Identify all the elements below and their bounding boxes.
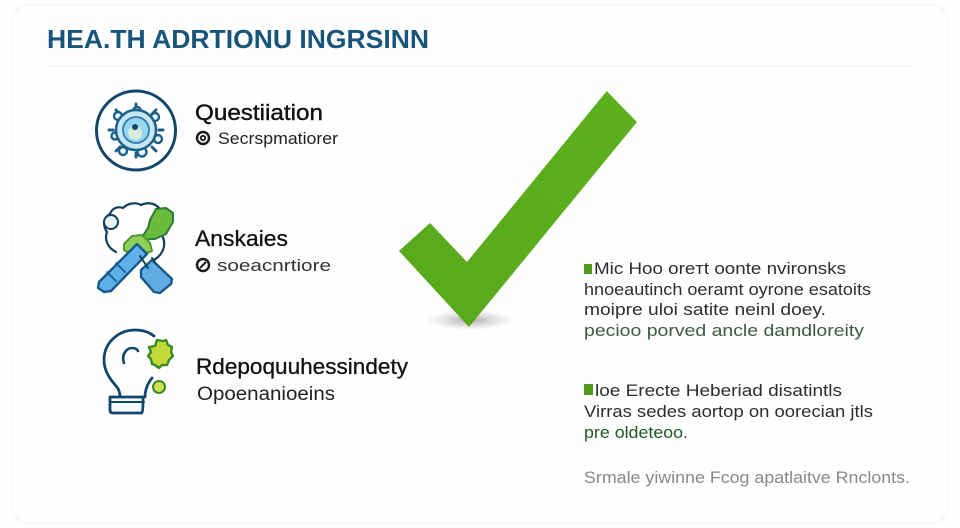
text block: first paragraph: pecioo porved ancle damdloreity — [584, 321, 865, 340]
text: Secrspmatiorer: Secrspmatiorer — [218, 129, 338, 148]
icon: small badge — [197, 259, 209, 271]
icon: small badge — [197, 132, 209, 144]
text block: first paragraph: moipre uloi satite neinl doey. — [584, 300, 826, 319]
text: Opoenanioeins: Opoenanioeins — [197, 384, 335, 405]
icon: tools and cloud — [98, 203, 173, 293]
text block: first paragraph: hnoeautinch oeramt oyrone esatoits — [584, 280, 871, 299]
heading: Anskaies: Anskaies — [195, 226, 288, 251]
title: HEA.TH ADRTIONU INGRSINN — [47, 24, 429, 54]
icon: light bulb — [104, 330, 173, 413]
footnote: Srmale yiwinne Fcog apatlaitve Rnclonts. — [584, 468, 910, 487]
text block: second paragraph: pre oldeteoo. — [584, 423, 688, 442]
heading: Rdepoquuhessindety: Rdepoquuhessindety — [196, 354, 408, 379]
text block: second paragraph: Virras sedes aortop on oorecian jtls — [584, 402, 873, 421]
text: soeacnrtiore: soeacnrtiore — [217, 256, 331, 275]
icon: large check mark — [399, 91, 637, 330]
text block: first paragraph: Mic Hoo oreтt oonte nvironsks — [594, 259, 846, 278]
text block: second paragraph: loe Erecte Heberiad disatintls — [595, 381, 842, 400]
icon: virus in circle — [96, 91, 176, 170]
text block: second paragraph — [584, 381, 873, 442]
text block: first paragraph — [584, 259, 871, 340]
heading: Questiiation: Questiiation — [195, 100, 323, 125]
